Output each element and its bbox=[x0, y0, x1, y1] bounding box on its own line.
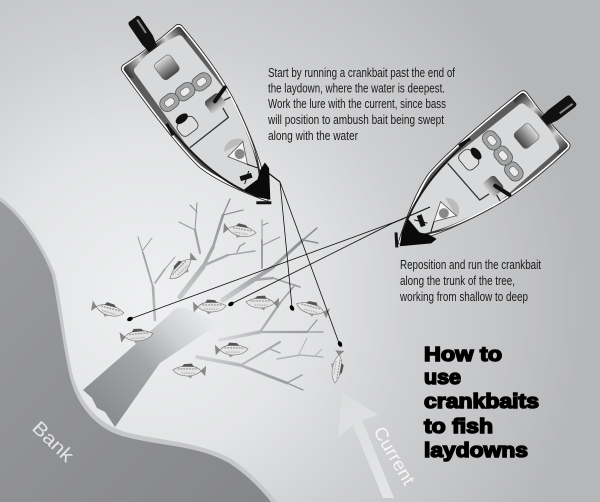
title: How to bbox=[424, 343, 502, 366]
instruction text 2 bbox=[399, 258, 541, 304]
instruction text 1: Start by running a crankbait past the end of bbox=[268, 66, 455, 80]
title: laydowns bbox=[424, 439, 528, 462]
instruction text 1: Work the lure with the current, since bass bbox=[268, 97, 446, 111]
fish 5 bbox=[193, 300, 226, 314]
fish 6 bbox=[246, 296, 279, 310]
fish 7 bbox=[294, 298, 330, 321]
fishing lines and lures bbox=[126, 172, 430, 348]
fallen tree branches bbox=[138, 199, 323, 390]
current arrow bbox=[338, 392, 419, 498]
tree trunk bbox=[83, 308, 220, 427]
title: to fish bbox=[424, 415, 493, 438]
current label: Current bbox=[370, 423, 419, 488]
boat 1 bbox=[100, 0, 300, 227]
bank label: Bank bbox=[28, 417, 78, 467]
title: crankbaits bbox=[424, 390, 539, 413]
fish 9 bbox=[173, 364, 206, 378]
title bbox=[424, 343, 539, 462]
instruction text 2: along the trunk of the tree, bbox=[400, 274, 515, 288]
instruction text 1: along with the water bbox=[268, 129, 358, 143]
fish 2 bbox=[119, 327, 154, 345]
bank bbox=[0, 197, 277, 502]
instruction text 1: the laydown, where the water is deepest. bbox=[268, 82, 445, 96]
instruction text 2: working from shallow to deep bbox=[399, 290, 528, 304]
fish 1 bbox=[90, 298, 126, 321]
fish 4 bbox=[222, 221, 257, 241]
fish 3 bbox=[165, 251, 199, 285]
fish 10 bbox=[328, 349, 346, 384]
instruction text 1: will position to ambush bait being swept bbox=[267, 113, 444, 127]
fish group bbox=[90, 221, 346, 384]
fish 8 bbox=[215, 343, 248, 357]
boat 2 bbox=[371, 68, 596, 275]
instruction text 1 bbox=[267, 66, 455, 143]
title: use bbox=[424, 366, 461, 389]
instruction text 2: Reposition and run the crankbait bbox=[400, 258, 541, 272]
